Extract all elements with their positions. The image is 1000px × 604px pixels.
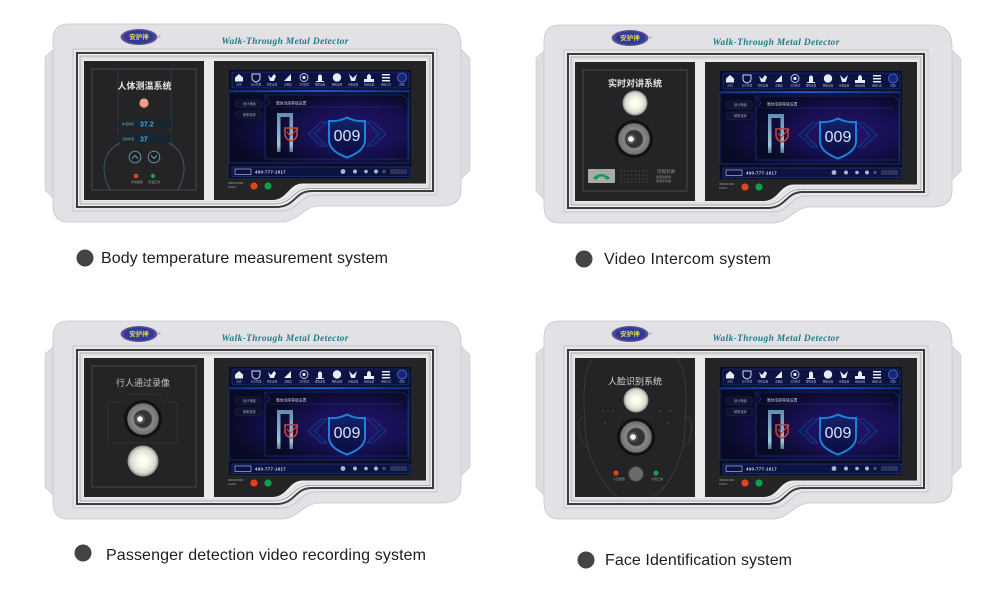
left control panel: face identification bbox=[575, 358, 695, 497]
left control panel: temperature: 体温阈值 bbox=[122, 121, 134, 126]
touch screen bbox=[705, 62, 917, 201]
touch screen: 系统日志 bbox=[872, 380, 883, 384]
touch screen: 工作模式 bbox=[299, 82, 310, 86]
bullet: passenger detection bbox=[74, 544, 92, 562]
bullet: video intercom bbox=[576, 250, 592, 268]
touch screen: 系统日志 bbox=[381, 380, 392, 384]
touch screen: 安全管理 bbox=[251, 380, 262, 384]
touch screen: 网络设置 bbox=[823, 380, 834, 384]
touch screen: 400-777-1617 bbox=[746, 466, 777, 472]
touch screen: 灵敏度 bbox=[284, 380, 292, 384]
touch screen: 整体浓度等级设置 bbox=[276, 398, 307, 402]
touch screen: 009 bbox=[825, 129, 851, 146]
touch screen: 系统设置 bbox=[855, 380, 866, 384]
left control panel: video recording: 行人通过录像 bbox=[116, 377, 170, 388]
touch screen: INDICATOR bbox=[228, 181, 243, 185]
touch screen: 计数设置 bbox=[839, 380, 850, 384]
touch screen: 400-777-1617 bbox=[255, 466, 286, 472]
left control panel: face identification: 人员报警 bbox=[613, 476, 625, 481]
touch screen: 防区设置 bbox=[267, 82, 278, 86]
touch screen: 报警设置 bbox=[315, 380, 326, 384]
caption: face identification: Face Identification system bbox=[605, 552, 792, 569]
touch screen: 首页 bbox=[727, 84, 733, 88]
left control panel: temperature: 37 bbox=[140, 136, 148, 144]
touch screen: 频率选择 bbox=[734, 113, 748, 118]
left control panel: intercom: 实时对讲系统 bbox=[608, 78, 662, 88]
touch screen: 灵敏度 bbox=[775, 84, 783, 88]
touch screen: 整体浓度等级设置 bbox=[276, 100, 307, 106]
left control panel: temperature: 37.2 bbox=[140, 122, 154, 128]
touch screen: 设计等级 bbox=[734, 398, 748, 403]
device title: Walk-Through Metal Detector bbox=[222, 334, 349, 344]
touch screen: 网络设置 bbox=[332, 82, 343, 86]
touch screen: 网络设置 bbox=[332, 380, 343, 384]
touch screen: 系统设置 bbox=[364, 380, 375, 384]
left control panel: temperature: 人体测温系统 bbox=[117, 80, 172, 91]
touch screen: 009 bbox=[825, 425, 851, 442]
logo: 安护神 bbox=[129, 329, 149, 338]
left control panel: temperature: 测温正常 bbox=[148, 179, 160, 184]
touch screen: 安全管理 bbox=[251, 82, 262, 86]
logo: 安护神 bbox=[620, 33, 640, 42]
touch screen: 系统设置 bbox=[855, 84, 866, 88]
touch screen: 400-777-1617 bbox=[255, 170, 286, 174]
caption: body temperature: Body temperature measurement system bbox=[101, 250, 388, 267]
touch screen: 灵敏度 bbox=[775, 380, 783, 384]
left control panel: intercom: 通话请按键 bbox=[656, 174, 671, 179]
touch screen: 整体浓度等级设置 bbox=[767, 398, 798, 402]
touch screen: 计数设置 bbox=[348, 82, 359, 86]
touch screen: 系统日志 bbox=[872, 84, 883, 88]
logo bbox=[120, 326, 161, 342]
touch screen: 频率选择 bbox=[243, 409, 257, 414]
touch screen: 设计等级 bbox=[243, 101, 257, 106]
logo: ® bbox=[649, 331, 652, 336]
touch screen: INDICATOR bbox=[719, 478, 734, 482]
left control panel: video recording bbox=[84, 358, 204, 497]
panel: passenger video recording device bbox=[45, 321, 470, 519]
caption: passenger detection: Passenger detection video recording system bbox=[106, 547, 426, 564]
touch screen: 计数设置 bbox=[348, 380, 359, 384]
touch screen: 安全管理 bbox=[742, 380, 753, 384]
touch screen: INDICATOR bbox=[228, 478, 243, 482]
left control panel: temperature: 当前体温 bbox=[122, 136, 134, 141]
left control panel: intercom: 通话中请讲 bbox=[656, 178, 671, 183]
touch screen: 009 bbox=[334, 128, 360, 145]
left control panel: temperature bbox=[84, 61, 204, 200]
panel: body temperature measurement device bbox=[45, 24, 470, 222]
logo bbox=[120, 29, 161, 45]
touch screen: LIGHT bbox=[228, 482, 237, 486]
touch screen: 设计等级 bbox=[243, 398, 257, 403]
touch screen: 首页 bbox=[727, 380, 733, 384]
touch screen: 防区设置 bbox=[758, 84, 769, 88]
touch screen: 009 bbox=[334, 425, 360, 442]
touch screen: 整体浓度等级设置 bbox=[767, 102, 798, 106]
left control panel: temperature: 异常报警 bbox=[131, 179, 143, 184]
left control panel: intercom bbox=[575, 62, 695, 201]
logo bbox=[612, 30, 652, 46]
logo: ® bbox=[158, 331, 161, 336]
touch screen: 报警设置 bbox=[806, 84, 817, 88]
touch screen: 计数设置 bbox=[839, 84, 850, 88]
logo: ® bbox=[649, 35, 652, 40]
bullet: face identification bbox=[578, 552, 594, 568]
left control panel: face identification: 人脸识别系统 bbox=[608, 376, 662, 386]
touch screen: 防区设置 bbox=[267, 380, 278, 384]
touch screen: 首页 bbox=[236, 380, 242, 384]
device title: Walk-Through Metal Detector bbox=[712, 334, 840, 344]
caption: video intercom: Video Intercom system bbox=[604, 251, 771, 268]
left control panel: intercom: 可视对讲 bbox=[657, 168, 675, 175]
logo bbox=[612, 326, 652, 342]
device title: Walk-Through Metal Detector bbox=[712, 38, 840, 48]
touch screen: 帮助 bbox=[890, 380, 896, 384]
touch screen: 频率选择 bbox=[734, 409, 748, 414]
touch screen: 帮助 bbox=[399, 82, 405, 86]
touch screen bbox=[214, 358, 426, 497]
touch screen: 帮助 bbox=[399, 380, 405, 384]
touch screen: 设计等级 bbox=[734, 102, 748, 107]
logo: ® bbox=[158, 34, 161, 39]
touch screen: 灵敏度 bbox=[284, 82, 292, 86]
panel: video intercom device bbox=[536, 25, 961, 223]
touch screen: LIGHT bbox=[719, 186, 728, 190]
touch screen: 工作模式 bbox=[790, 84, 801, 88]
touch screen: 工作模式 bbox=[299, 380, 310, 384]
touch screen: 系统日志 bbox=[381, 82, 392, 86]
touch screen: 报警设置 bbox=[315, 82, 326, 86]
touch screen: LIGHT bbox=[228, 185, 237, 189]
touch screen: 报警设置 bbox=[806, 380, 817, 384]
touch screen: LIGHT bbox=[719, 482, 728, 486]
touch screen: 网络设置 bbox=[823, 84, 834, 88]
touch screen: 首页 bbox=[236, 82, 242, 86]
touch screen: 防区设置 bbox=[758, 380, 769, 384]
logo: 安护神 bbox=[129, 32, 149, 41]
bullet: body temperature bbox=[76, 250, 94, 266]
device title: Walk-Through Metal Detector bbox=[222, 37, 349, 47]
touch screen bbox=[214, 61, 426, 200]
logo: 安护神 bbox=[620, 329, 640, 338]
touch screen: 帮助 bbox=[890, 84, 896, 88]
touch screen: 安全管理 bbox=[742, 84, 753, 88]
touch screen: 系统设置 bbox=[364, 82, 375, 86]
touch screen: 频率选择 bbox=[243, 112, 257, 117]
touch screen: 工作模式 bbox=[790, 380, 801, 384]
left control panel: face identification: 识别正常 bbox=[651, 476, 663, 481]
touch screen: INDICATOR bbox=[719, 182, 734, 186]
touch screen bbox=[705, 358, 917, 497]
panel: face identification device bbox=[536, 321, 961, 519]
touch screen: 400-777-1617 bbox=[746, 170, 777, 176]
